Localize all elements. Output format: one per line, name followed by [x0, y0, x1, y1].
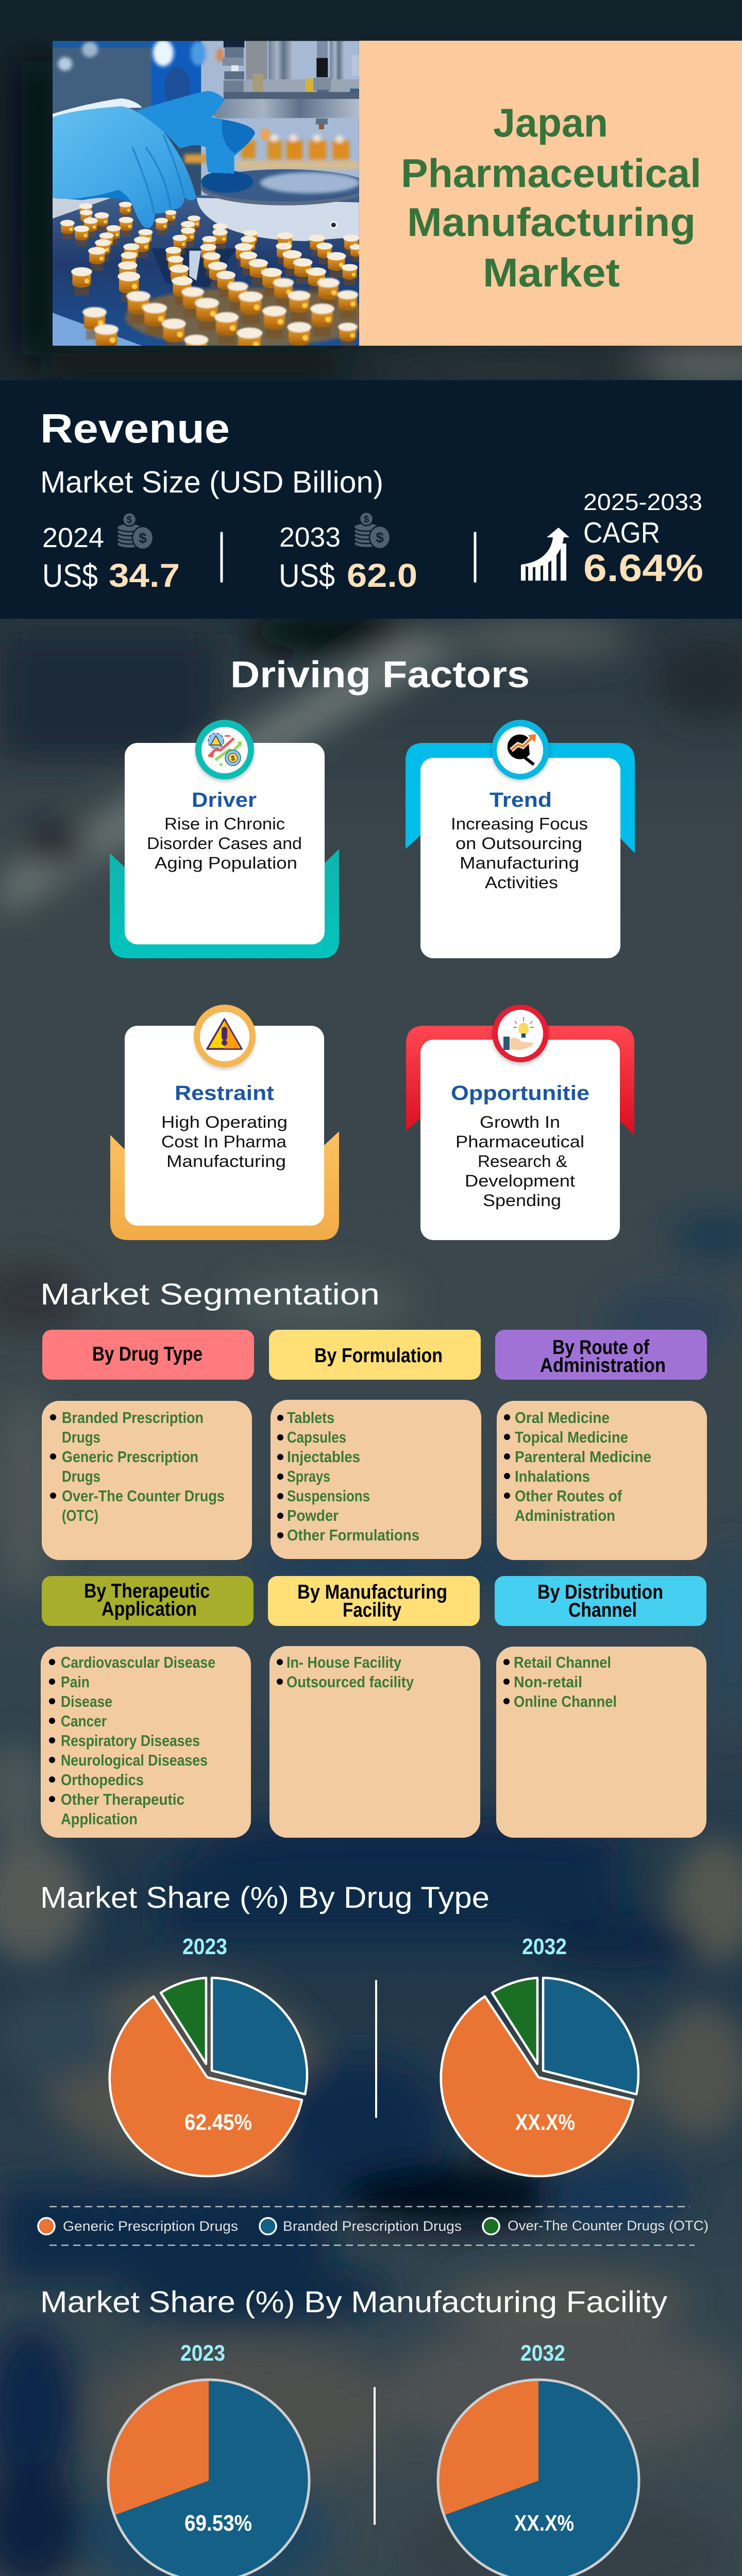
revenue panel	[0, 380, 742, 619]
title text: Manufacturing	[407, 199, 696, 245]
therapeutic list: Pain	[61, 1673, 90, 1691]
formulation list: Suspensions	[287, 1487, 370, 1505]
panel: by distribution channel	[495, 1576, 706, 1838]
facility list: Outsourced facility	[286, 1673, 414, 1691]
opportunity text: Spending	[483, 1191, 561, 1210]
panel: by therapeutic application: Application	[102, 1598, 197, 1620]
route list: Topical Medicine	[515, 1428, 628, 1446]
distribution list	[503, 1653, 617, 1710]
route list: Other Routes of	[515, 1487, 622, 1505]
driver text: Aging Population	[155, 854, 297, 872]
panel: by drug type	[42, 1330, 254, 1560]
legend: drug type	[38, 2207, 709, 2245]
drug type list	[50, 1409, 225, 1524]
chart: facility 2023 pie	[108, 2341, 310, 2576]
panel: by formulation: By Formulation	[314, 1345, 443, 1367]
drug type list: Generic Prescription	[62, 1448, 198, 1466]
restraint text: Manufacturing	[166, 1152, 286, 1171]
icon: trend	[492, 720, 549, 779]
chart: drug type 2032 pie	[441, 1934, 638, 2176]
heading: market share by drug type: Market Share (%) By Drug Type	[40, 1881, 490, 1914]
heading: driving factors: Driving Factors	[230, 654, 530, 696]
formulation list: Powder	[287, 1506, 339, 1524]
formulation list: Sprays	[287, 1467, 330, 1485]
legend: drug type: Branded Prescription Drugs	[283, 2218, 462, 2234]
restraint text	[161, 1113, 288, 1171]
2024 value: US$	[42, 558, 98, 594]
trend text: on Outsourcing	[456, 834, 582, 853]
panel: by manufacturing facility: Facility	[343, 1599, 401, 1621]
facility list: In- House Facility	[286, 1653, 402, 1671]
opportunity title: Opportunitie	[451, 1082, 589, 1105]
opportunity text: Research &	[478, 1152, 567, 1171]
panel: by route of administration	[495, 1330, 707, 1560]
2033 value	[279, 522, 417, 594]
drug type list: Branded Prescription	[62, 1409, 204, 1427]
formulation list: Injectables	[287, 1448, 360, 1466]
opportunity text: Development	[465, 1172, 575, 1190]
icon: driver: +	[219, 760, 224, 769]
route list: Parenteral Medicine	[515, 1448, 651, 1466]
restraint title: Restraint	[175, 1082, 274, 1105]
CAGR block: CAGR	[583, 516, 660, 549]
driver text: Disorder Cases and	[147, 834, 302, 853]
icon: driver: $	[231, 754, 235, 762]
title panel	[359, 41, 742, 346]
hero photo: gloved hand handling vials	[53, 41, 359, 346]
trend text: Activities	[485, 873, 558, 892]
revenue heading: Revenue	[40, 405, 230, 451]
drug type list: Over-The Counter Drugs	[62, 1487, 225, 1505]
therapeutic list: Cardiovascular Disease	[61, 1653, 215, 1671]
panel: by distribution channel: Channel	[568, 1599, 637, 1621]
heading: market segmentation: Market Segmentation	[40, 1278, 380, 1311]
icon: coins 2024: $	[127, 515, 132, 526]
drug type list: (OTC)	[62, 1506, 98, 1524]
panel: by route of administration: Administration	[540, 1354, 666, 1377]
trend text: Manufacturing	[460, 854, 579, 872]
panel: driver card	[110, 720, 339, 958]
icon: growth chart	[520, 528, 569, 581]
chart: facility 2032 pie	[438, 2341, 639, 2576]
panel: restraint card	[110, 1005, 339, 1240]
restraint text: Cost In Pharma	[161, 1132, 286, 1151]
panel: by therapeutic application	[41, 1576, 254, 1838]
chart: facility 2023 pie: 69.53%	[184, 2511, 252, 2536]
panel: by therapeutic application: By Therapeutic	[84, 1580, 210, 1602]
chart: facility 2023 pie: 2023	[180, 2341, 225, 2366]
icon: coins 2033: $	[364, 514, 369, 525]
therapeutic list: Disease	[61, 1692, 112, 1710]
therapeutic list: Respiratory Diseases	[61, 1732, 200, 1750]
distribution list: Retail Channel	[514, 1653, 611, 1671]
panel: by manufacturing facility: By Manufacturing	[297, 1581, 447, 1603]
formulation list: Tablets	[287, 1409, 334, 1427]
chart divider	[375, 1980, 377, 2118]
chart: facility 2032 pie: 2032	[520, 2341, 565, 2366]
trend title: Trend	[490, 789, 552, 811]
opportunity text: Growth In	[480, 1113, 560, 1131]
route list: Administration	[515, 1506, 615, 1524]
divider	[474, 532, 476, 583]
route list	[504, 1409, 651, 1524]
panel: by manufacturing facility	[268, 1576, 480, 1838]
title text	[401, 100, 701, 295]
route list: Inhalations	[515, 1467, 590, 1485]
icon: coins 2033: $	[376, 530, 384, 546]
chart divider	[374, 2387, 376, 2525]
formulation list: Other Formulations	[287, 1526, 419, 1544]
drug type list: Drugs	[62, 1428, 100, 1446]
icon: restraint warning	[194, 1005, 256, 1067]
icon: coins 2033	[354, 512, 390, 549]
chart: facility 2032 pie: XX.X%	[514, 2511, 574, 2536]
title text: Japan	[493, 100, 608, 145]
panel: by drug type: By Drug Type	[92, 1343, 203, 1365]
chart: drug type 2032 pie: 2032	[522, 1934, 567, 1959]
therapeutic list: Neurological Diseases	[61, 1751, 208, 1769]
therapeutic list: Cancer	[61, 1712, 107, 1730]
icon: coins 2024: $	[139, 530, 147, 546]
trend text	[451, 815, 588, 892]
panel: by formulation	[269, 1330, 481, 1559]
panel: trend card	[406, 720, 635, 958]
formulation list: Capsules	[287, 1428, 346, 1446]
2033 value: 2033	[279, 522, 341, 553]
therapeutic list: Other Therapeutic	[61, 1790, 184, 1808]
title text: Market	[483, 250, 620, 295]
therapeutic list: Orthopedics	[61, 1771, 144, 1789]
divider	[221, 532, 223, 583]
trend text: Increasing Focus	[451, 815, 588, 833]
distribution list: Non-retail	[514, 1673, 582, 1691]
panel: opportunity card	[406, 1005, 634, 1240]
icon: coins 2024	[117, 513, 153, 549]
drug type list: Drugs	[62, 1467, 100, 1485]
chart: drug type 2023 pie	[110, 1934, 307, 2176]
2033 value: US$	[279, 558, 335, 594]
therapeutic list: Application	[61, 1810, 138, 1828]
CAGR block: 6.64%	[583, 547, 703, 589]
route list: Oral Medicine	[515, 1409, 610, 1427]
icon: opportunity	[492, 1005, 549, 1062]
chart: drug type 2023 pie: 2023	[182, 1934, 227, 1959]
panel: by route of administration: By Route of	[552, 1336, 650, 1359]
therapeutic list	[49, 1653, 215, 1828]
legend: drug type: Over-The Counter Drugs (OTC)	[508, 2218, 709, 2233]
legend: drug type: Generic Prescription Drugs	[63, 2218, 238, 2234]
restraint text: High Operating	[161, 1113, 288, 1131]
CAGR block: 2025-2033	[583, 489, 702, 515]
opportunity text	[456, 1113, 584, 1210]
panel: by distribution channel: By Distribution	[537, 1581, 663, 1603]
distribution list: Online Channel	[514, 1692, 617, 1710]
facility list	[277, 1653, 414, 1691]
driver text: Rise in Chronic	[164, 815, 285, 833]
driver text	[147, 815, 302, 872]
chart: drug type 2023 pie: 62.45%	[184, 2110, 252, 2135]
chart: drug type 2032 pie: XX.X%	[515, 2110, 575, 2135]
2024 value: 2024	[42, 522, 104, 553]
CAGR block	[583, 489, 703, 589]
2024 value	[42, 522, 180, 594]
driver title: Driver	[192, 789, 257, 811]
formulation list	[277, 1409, 419, 1544]
icon: driver	[195, 720, 254, 779]
market size label: Market Size (USD Billion)	[40, 465, 383, 499]
2024 value: 34.7	[109, 557, 180, 594]
opportunity text: Pharmaceutical	[456, 1132, 584, 1151]
title text: Pharmaceutical	[401, 150, 701, 196]
2033 value: 62.0	[347, 557, 417, 594]
heading: market share by manufacturing facility: Market Share (%) By Manufacturing Facility	[40, 2285, 667, 2319]
